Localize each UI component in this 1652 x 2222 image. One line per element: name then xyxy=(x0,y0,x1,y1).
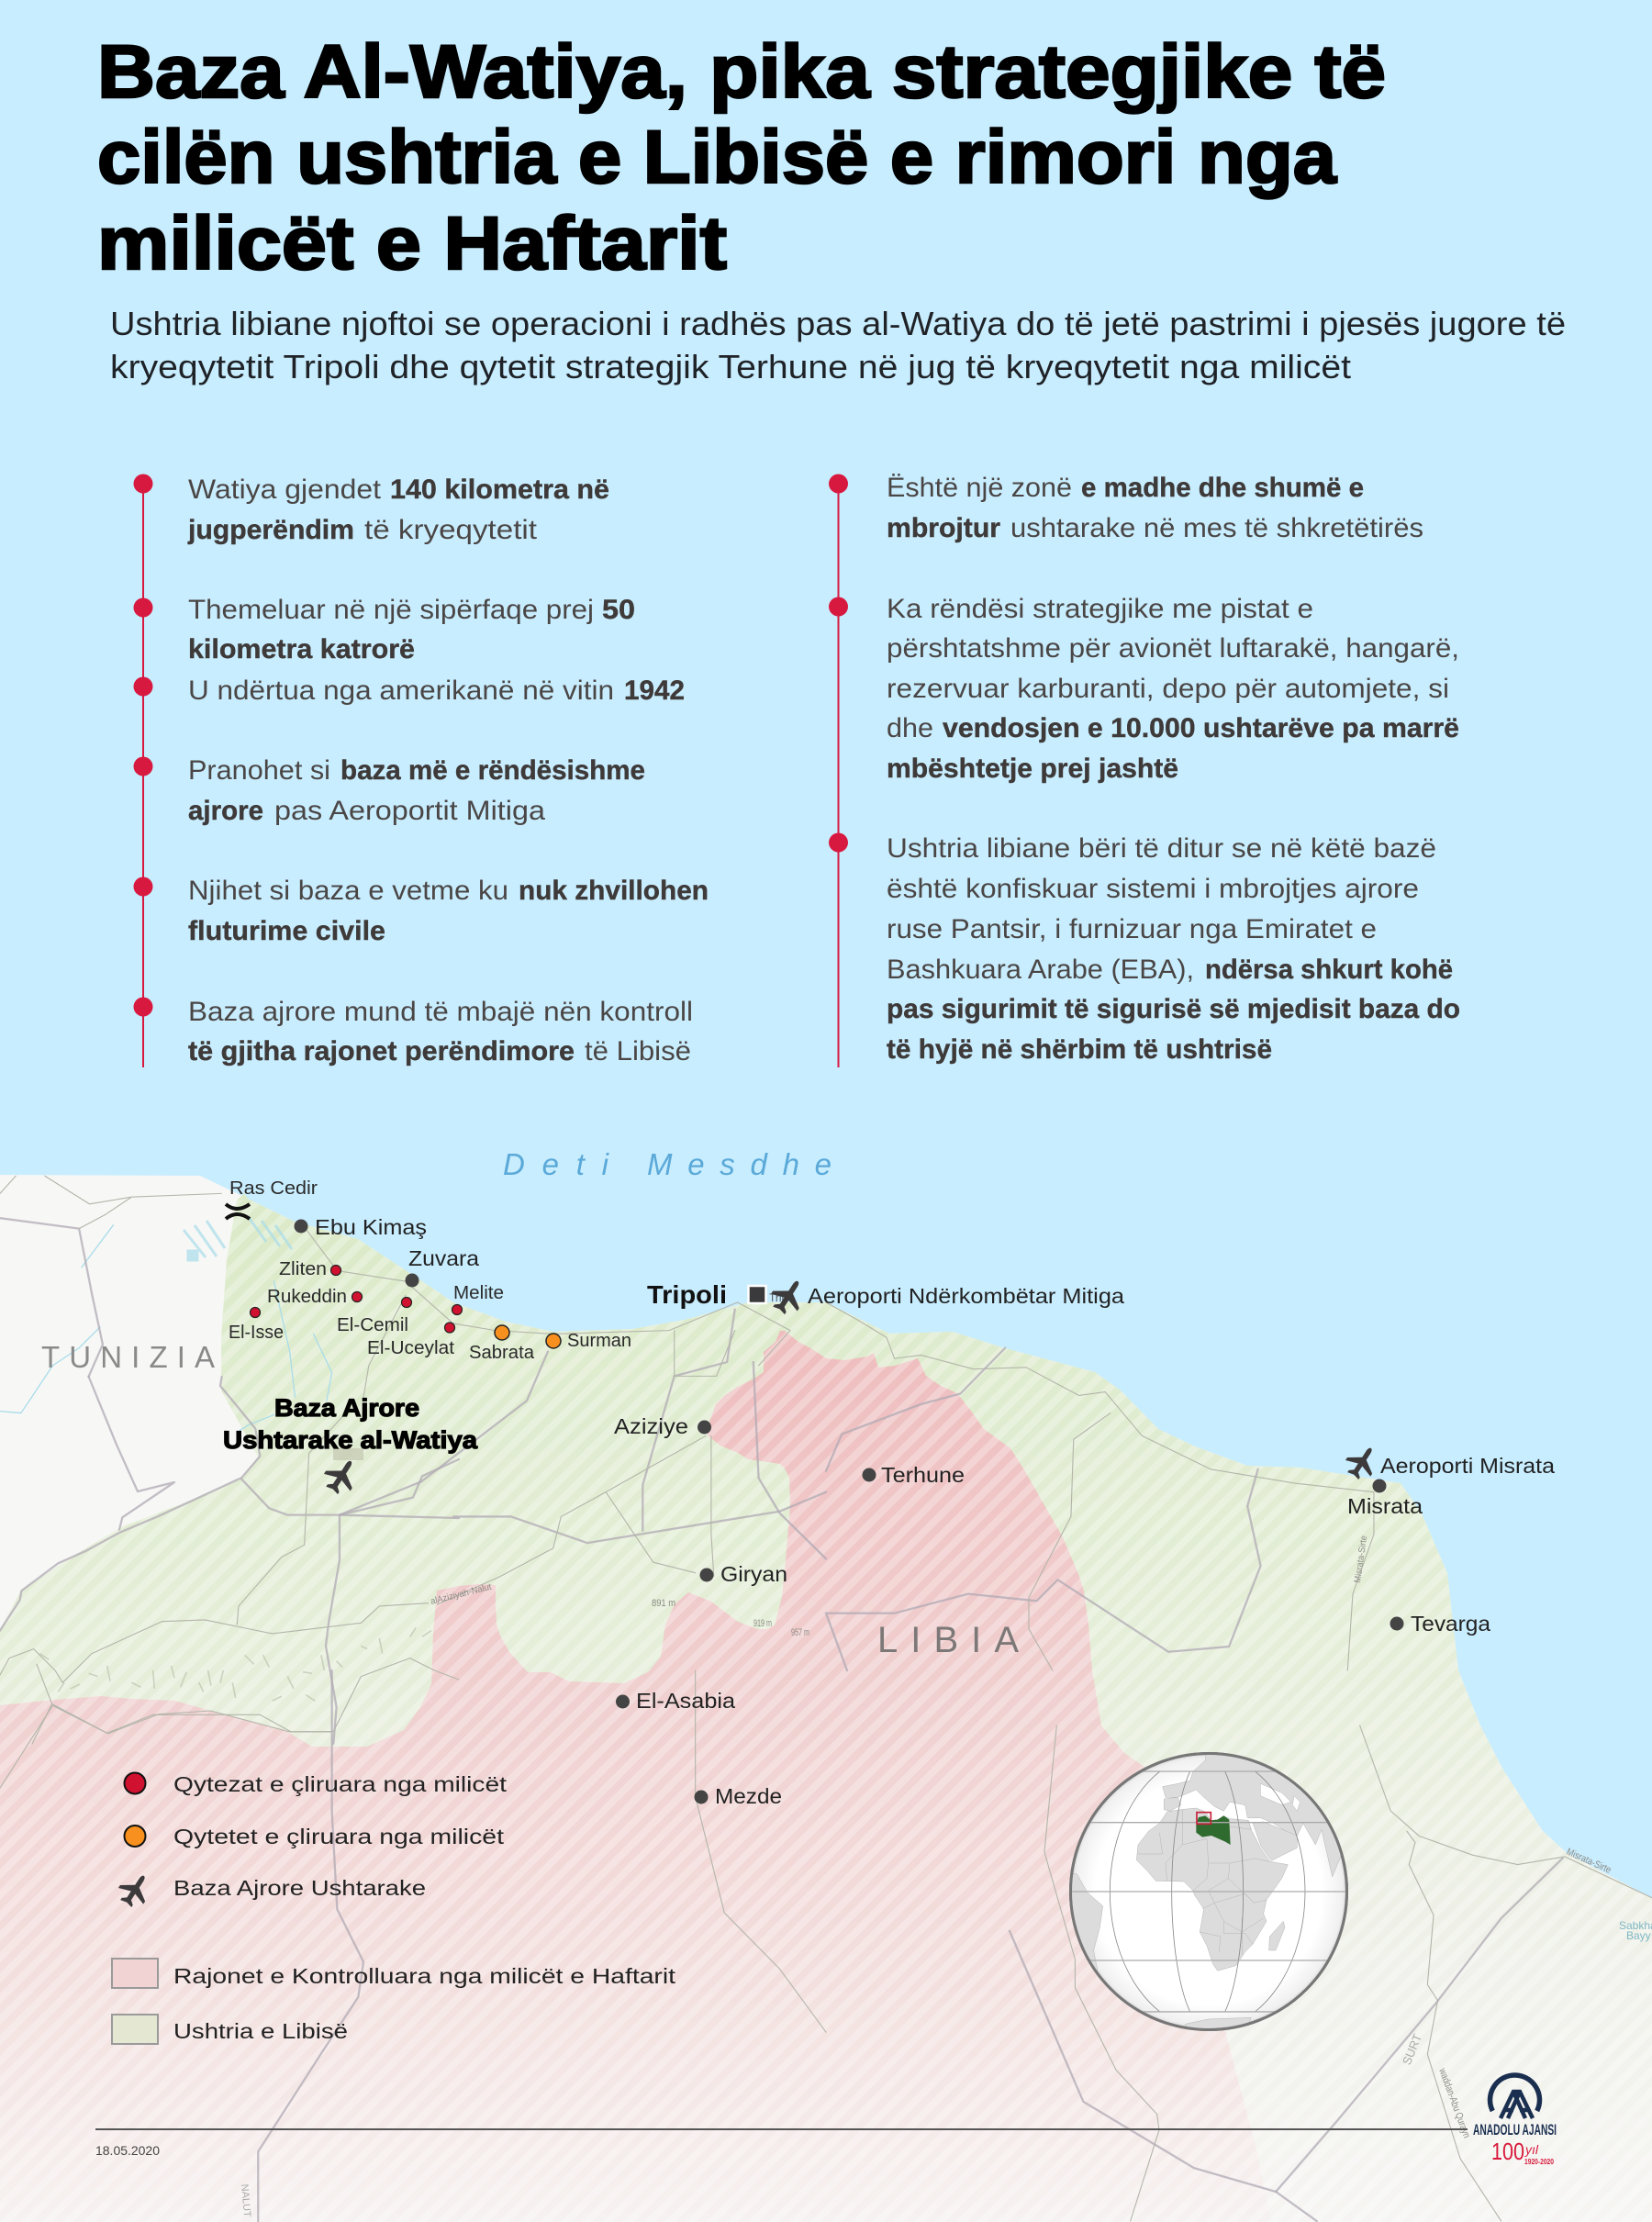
fact: no civil flights: Njihet si baza e vetme ku xyxy=(188,876,508,906)
fact: strategic importance: mbështetje prej jashtë xyxy=(887,754,1178,784)
towns liberated: red markers xyxy=(250,1265,463,1333)
legend: towns: Qytezat e çliruara nga milicët xyxy=(173,1772,508,1796)
place labels: Ras Cedir xyxy=(229,1178,318,1199)
fact: built: U ndërtua nga amerikanë në vitin xyxy=(188,676,614,706)
small map annotations: SURT xyxy=(1400,2032,1424,2067)
fact: large protected zone: e madhe dhe shumë e xyxy=(1081,473,1364,503)
subtitle: Ushtria libiane njoftoi se operacioni i radhës pas al-Watiya do të jetë pastrimi i pjesës jugore të xyxy=(110,305,1566,342)
grid xyxy=(1109,1771,1305,2012)
place labels: Zuvara xyxy=(408,1246,479,1270)
roads: Tripoli region, zoom sheet 1 xyxy=(0,1176,826,1604)
legend: Haftar regions xyxy=(112,1959,676,1988)
fact: strategic importance: përshtatshme për avionët luftarakë, hangarë, xyxy=(887,633,1459,664)
subtitle xyxy=(110,305,1566,385)
title: Baza Al-Watiya, pika strategjike të xyxy=(97,30,1386,114)
place labels: El-Isse xyxy=(229,1323,284,1343)
region: Libyan army territory xyxy=(0,1193,1652,2222)
legend: air base xyxy=(114,1868,426,1912)
logo: Anadolu Ajansi: ANADOLU AJANSI xyxy=(1473,2121,1557,2138)
small map annotations xyxy=(239,1535,1652,2217)
fact: strategic importance: rezervuar karburanti, depo për automjete, si xyxy=(887,674,1449,704)
capital: Tripoli: Trip xyxy=(769,1291,788,1304)
place labels: Aeroporti Ndërkombëtar Mitiga xyxy=(808,1284,1124,1308)
place labels: Mezde xyxy=(715,1784,782,1808)
place labels: Surman xyxy=(567,1331,631,1351)
footer line xyxy=(95,2128,1468,2130)
fact: location: të kryeqytetit xyxy=(364,515,538,545)
place labels: Aziziye xyxy=(614,1414,688,1438)
place labels: Sabrata xyxy=(469,1343,535,1363)
legend xyxy=(112,1772,676,2044)
fact: control: të gjitha rajonet perëndimore xyxy=(188,1036,575,1066)
rivers xyxy=(0,1225,332,1433)
rock texture xyxy=(39,1627,431,1701)
map xyxy=(0,1147,1652,2222)
logo: Anadolu Ajansi: 100 xyxy=(1491,2138,1524,2165)
sea label: Mesdhe xyxy=(647,1147,832,1181)
continents xyxy=(1072,1755,1341,2028)
icon: plane Mitiga xyxy=(765,1273,811,1319)
airbase patch xyxy=(333,1448,363,1460)
place labels: El-Uceylat xyxy=(367,1338,454,1358)
fact: Pantsir system: ruse Pantsir, i furnizuar nga Emiratet e xyxy=(887,914,1377,944)
fact: Pantsir system: Bashkuara Arabe (EBA), xyxy=(887,955,1194,985)
icon: plane Al-Watiya xyxy=(318,1453,364,1499)
fact: importance: baza më e rëndësishme xyxy=(340,755,645,786)
fact: Pantsir system: të hyjë në shërbim të ushtrisë xyxy=(887,1034,1272,1065)
title: milicët e Haftarit xyxy=(97,202,727,285)
title: cilën ushtria e Libisë e rimori nga xyxy=(97,116,1337,199)
fact: surface: kilometra katrorë xyxy=(188,634,415,664)
small map annotations: waddan-Abu Qurayn xyxy=(1436,2066,1472,2139)
airbase label: Baza Ajrore xyxy=(274,1394,419,1422)
capital: Tripoli: Tripoli xyxy=(647,1280,727,1309)
place labels: Misrata xyxy=(1347,1494,1423,1518)
place labels: Tevarga xyxy=(1411,1612,1490,1636)
fact: large protected zone: Është një zonë xyxy=(887,473,1072,503)
place labels: Rukeddin xyxy=(267,1287,347,1307)
legend: Libyan army: Ushtria e Libisë xyxy=(173,2019,348,2043)
fact: surface: Themeluar në një sipërfaqe prej xyxy=(188,595,594,625)
fact: no civil flights: fluturime civile xyxy=(188,916,385,946)
small map annotations: 891 m xyxy=(652,1598,675,1609)
timeline right xyxy=(829,474,848,1067)
fact: location xyxy=(187,475,609,545)
place labels: El-Cemil xyxy=(337,1315,408,1335)
roads: southeast, zoom sheet 4 xyxy=(1010,1725,1652,2221)
title xyxy=(97,30,1386,285)
fact: importance: pas Aeroportit Mitiga xyxy=(274,796,545,826)
fact: importance: ajrore xyxy=(188,796,263,826)
cities liberated: orange markers xyxy=(495,1325,561,1348)
airbase label: Ushtarake al-Watiya xyxy=(223,1426,478,1454)
fact: location: 140 kilometra në xyxy=(390,475,609,505)
roads: south, zoom sheet 3 xyxy=(0,1670,826,2221)
fact: importance: Pranohet si xyxy=(188,755,330,786)
place labels xyxy=(229,1178,1555,1808)
subtitle: kryeqytetit Tripoli dhe qytetit strategjik Terhune në jug të kryeqytetit nga milicët xyxy=(110,348,1351,385)
small map annotations: Misrata-Sirte xyxy=(1353,1535,1369,1583)
location square xyxy=(1197,1813,1211,1824)
fact: strategic importance xyxy=(887,594,1459,784)
icon: plane Misrata xyxy=(1341,1440,1383,1484)
logo: Anadolu Ajansi: yıl xyxy=(1524,2142,1539,2157)
fact: Pantsir system xyxy=(887,833,1460,1065)
fact: strategic importance: Ka rëndësi strategjike me pistat e xyxy=(887,594,1313,624)
logo: Anadolu Ajansi: 1920-2020 xyxy=(1524,2158,1554,2166)
stripes overlay xyxy=(0,1199,1652,2222)
legend: Haftar regions: Rajonet e Kontrolluara nga milicët e Haftarit xyxy=(173,1964,676,1988)
fact: strategic importance: vendosjen e 10.000 ushtarëve pa marrë xyxy=(943,713,1459,743)
place labels: Giryan xyxy=(720,1562,787,1586)
place labels: Aeroporti Misrata xyxy=(1380,1454,1555,1478)
fact: no civil flights xyxy=(188,876,709,946)
panel: right bullet list xyxy=(829,473,1460,1067)
small map annotations: 957 m xyxy=(791,1627,809,1638)
timeline left xyxy=(134,474,152,1067)
sea label xyxy=(503,1147,832,1181)
globe locator xyxy=(1069,1752,1348,2031)
fact: control xyxy=(188,997,693,1066)
country label: Libya: LIBIA xyxy=(877,1620,1019,1660)
roads: eastern coast, zoom sheet 2 xyxy=(826,1302,1374,1670)
small map annotations: 919 m xyxy=(753,1618,772,1629)
fact: Pantsir system: ndërsa shkurt kohë xyxy=(1205,955,1453,985)
country label: Tunisia: TUNIZIA xyxy=(41,1340,215,1374)
fact: location: jugperëndim xyxy=(187,515,354,545)
fact: surface: 50 xyxy=(602,595,635,625)
small map annotations: alAziziyah-Nalut xyxy=(430,1582,493,1607)
cities: minor dark markers xyxy=(294,1219,1404,1804)
airbase label xyxy=(223,1394,478,1454)
legend: cities: Qytetet e çliruara nga milicët xyxy=(173,1825,505,1848)
logo: Anadolu Ajansi xyxy=(1473,2075,1557,2166)
small map annotations: NALUT xyxy=(239,2183,252,2217)
salt flats near Ras Cedir xyxy=(184,1216,292,1260)
fact: surface xyxy=(188,595,635,664)
fact: large protected zone: ushtarake në mes të shkretëtirës xyxy=(1010,513,1423,543)
fact: built: 1942 xyxy=(624,676,685,706)
Libya highlight xyxy=(1196,1815,1231,1845)
fact: Pantsir system: është konfiskuar sistemi i mbrojtjes ajrore xyxy=(887,874,1419,904)
fact: large protected zone: mbrojtur xyxy=(887,513,1000,543)
small map annotations: Misrata-Sirte xyxy=(1565,1847,1613,1876)
fact: importance xyxy=(188,755,645,826)
fact: strategic importance: dhe xyxy=(887,713,933,743)
place labels: Terhune xyxy=(881,1463,965,1487)
region: Haftar militia territory xyxy=(0,1331,1271,2222)
fact: Pantsir system: Ushtria libiane bëri të ditur se në këtë bazë xyxy=(887,833,1436,864)
place labels: El-Asabia xyxy=(636,1689,735,1713)
fact: control: të Libisë xyxy=(585,1036,691,1066)
border crossing: Ras Cedir xyxy=(226,1204,250,1219)
fact: location: Watiya gjendet xyxy=(188,475,382,505)
capital: Tripoli xyxy=(647,1280,788,1309)
fact: Pantsir system: pas sigurimit të sigurisë së mjedisit baza do xyxy=(887,994,1460,1024)
fact: large protected zone xyxy=(887,473,1423,543)
fact: control: Baza ajrore mund të mbajë nën kontroll xyxy=(188,997,693,1027)
place labels: Ebu Kimaş xyxy=(315,1215,427,1239)
place labels: Zliten xyxy=(279,1259,327,1279)
sea label: Deti xyxy=(503,1147,610,1181)
small map annotations: Bayy xyxy=(1626,1929,1651,1942)
fact: no civil flights: nuk zhvillohen xyxy=(519,876,709,906)
legend: air base: Baza Ajrore Ushtarake xyxy=(173,1876,426,1900)
date: 18.05.2020 xyxy=(95,2144,160,2158)
roads: west, zoom sheet 12 xyxy=(0,1377,459,1744)
panel: left bullet list xyxy=(134,474,709,1067)
place labels: Melite xyxy=(453,1283,504,1303)
land: Tunisia and base land xyxy=(0,1175,1652,2222)
legend: Libyan army xyxy=(112,2015,348,2044)
